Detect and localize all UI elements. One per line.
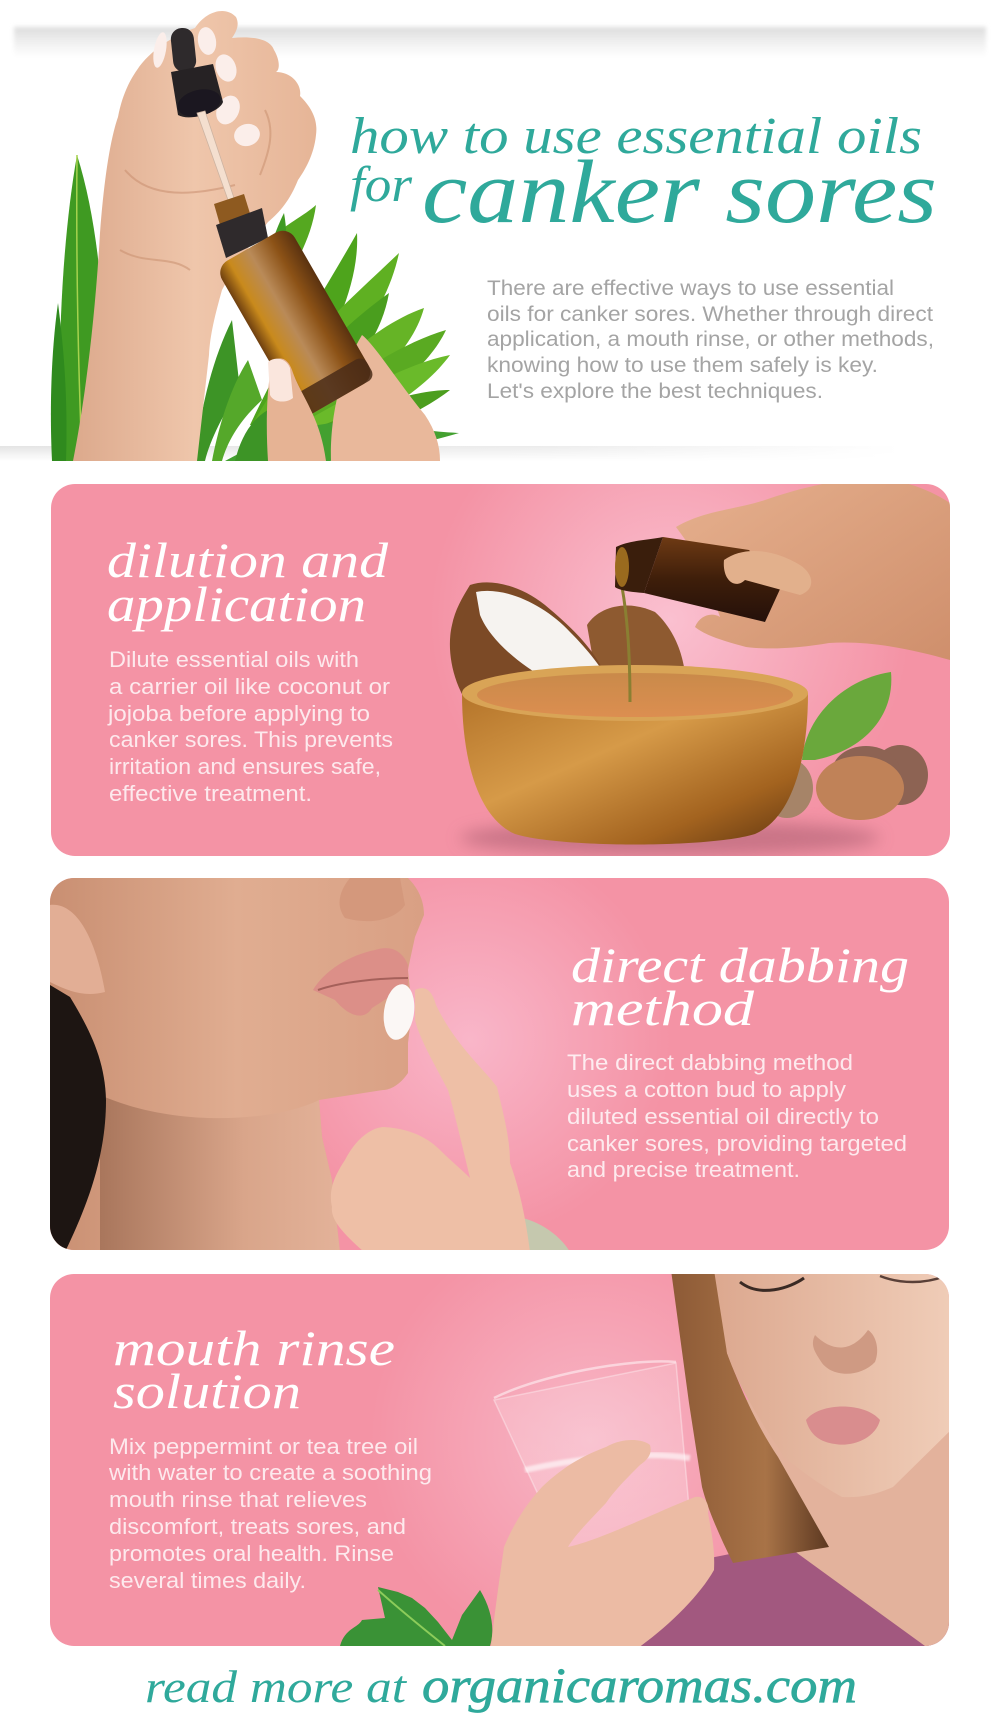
shirt [620, 1540, 954, 1646]
intro paragraph: There are effective ways to use essential [487, 276, 894, 300]
oil surface [477, 673, 793, 717]
footer site name: organicaromas.com [422, 1657, 857, 1713]
front coconut [450, 582, 600, 694]
dropper [170, 27, 234, 200]
panel background [50, 878, 949, 1250]
right supporting finger [331, 335, 440, 461]
amber bottle [214, 194, 375, 419]
neck shade [100, 1095, 340, 1252]
title line two: canker sores [422, 143, 937, 242]
bowl body [462, 693, 808, 844]
body text: discomfort, treats sores, and [109, 1514, 406, 1539]
heading: method [571, 980, 755, 1036]
heading: direct dabbing [571, 937, 909, 993]
hair [50, 985, 106, 1252]
intro paragraph: knowing how to use them safely is key. [487, 353, 878, 377]
fingernails [151, 26, 262, 149]
bowl rim [462, 665, 808, 721]
body text: The direct dabbing method [567, 1050, 853, 1075]
body text: and precise treatment. [567, 1157, 800, 1182]
shirt [524, 1218, 569, 1250]
body text: several times daily. [109, 1568, 306, 1593]
heading [571, 937, 909, 1036]
body text: with water to create a soothing [108, 1460, 432, 1485]
nuts [778, 745, 928, 820]
footer call to action [145, 1657, 857, 1713]
glass rim [494, 1361, 676, 1398]
bottom hero shadow [0, 446, 748, 456]
hero illustration: hand holding dropper and amber bottle [51, 11, 459, 461]
heading [107, 532, 389, 632]
bowl shadow [460, 820, 880, 856]
body text: Mix peppermint or tea tree oil [109, 1434, 418, 1459]
body text [567, 1050, 907, 1182]
photo: woman dabbing lip [50, 878, 570, 1252]
second eye [880, 1276, 945, 1282]
heading: dilution and [107, 532, 389, 588]
amber bottle [615, 537, 781, 622]
heading [113, 1320, 395, 1419]
palm creases [120, 110, 270, 270]
body text: a carrier oil like coconut or [109, 674, 390, 699]
hand [491, 1440, 714, 1648]
body text [107, 647, 393, 806]
title for: for [350, 156, 413, 212]
footer lead-in: read more at [145, 1661, 407, 1712]
cotton ball [384, 984, 414, 1040]
tall leaves left [50, 155, 98, 461]
hand [331, 988, 530, 1252]
body text: jojoba before applying to [107, 701, 370, 726]
ear [50, 905, 105, 994]
body text: canker sores. This prevents [109, 727, 393, 752]
heading: mouth rinse [113, 1320, 395, 1376]
body text: uses a cotton bud to apply [567, 1077, 846, 1102]
title [350, 108, 937, 242]
heading: solution [113, 1363, 301, 1419]
mint leaves [340, 1587, 492, 1646]
panel: dilution and application [51, 478, 950, 856]
panel: direct dabbing method [50, 878, 949, 1252]
hand [676, 478, 950, 660]
panel background [50, 1274, 949, 1646]
chest and neck skin [720, 1400, 954, 1646]
palm leaves right [195, 205, 459, 461]
top shadow band [14, 27, 986, 57]
heading: application [107, 576, 366, 632]
body text [108, 1434, 432, 1593]
lips [313, 948, 408, 1016]
oil stream [622, 587, 630, 702]
illustration: coconut, bowl, nuts [450, 478, 950, 856]
back coconut [587, 606, 684, 666]
intro paragraph: Let's explore the best techniques. [487, 379, 823, 403]
lips [806, 1406, 880, 1445]
body text: irritation and ensures safe, [109, 754, 381, 779]
panel: mouth rinse solution [50, 1270, 954, 1648]
thumb [724, 551, 811, 595]
hair [671, 1270, 829, 1563]
face [714, 1270, 954, 1497]
body text: promotes oral health. Rinse [109, 1541, 394, 1566]
body text: diluted essential oil directly to [567, 1104, 879, 1129]
intro paragraph: application, a mouth rinse, or other methods, [487, 327, 934, 351]
body text: effective treatment. [109, 781, 312, 806]
nose [340, 878, 405, 921]
photo: woman rinsing mouth [340, 1270, 954, 1648]
body text: Dilute essential oils with [109, 647, 359, 672]
face and neck [50, 878, 424, 1252]
body text: mouth rinse that relieves [109, 1487, 367, 1512]
title line one: how to use essential oils [350, 108, 922, 165]
glass [494, 1363, 692, 1555]
closed eye [740, 1278, 804, 1290]
panel background [51, 484, 950, 856]
intro paragraph [487, 276, 934, 403]
coconut flesh [476, 590, 599, 670]
nose shadow [813, 1330, 877, 1374]
hand and arm [73, 11, 316, 461]
mouth shadow [318, 978, 408, 990]
front finger with nail [267, 358, 326, 461]
intro paragraph: oils for canker sores. Whether through direct [487, 302, 933, 326]
body text: canker sores, providing targeted [567, 1131, 907, 1156]
water line [525, 1455, 690, 1470]
leaf [802, 672, 891, 760]
